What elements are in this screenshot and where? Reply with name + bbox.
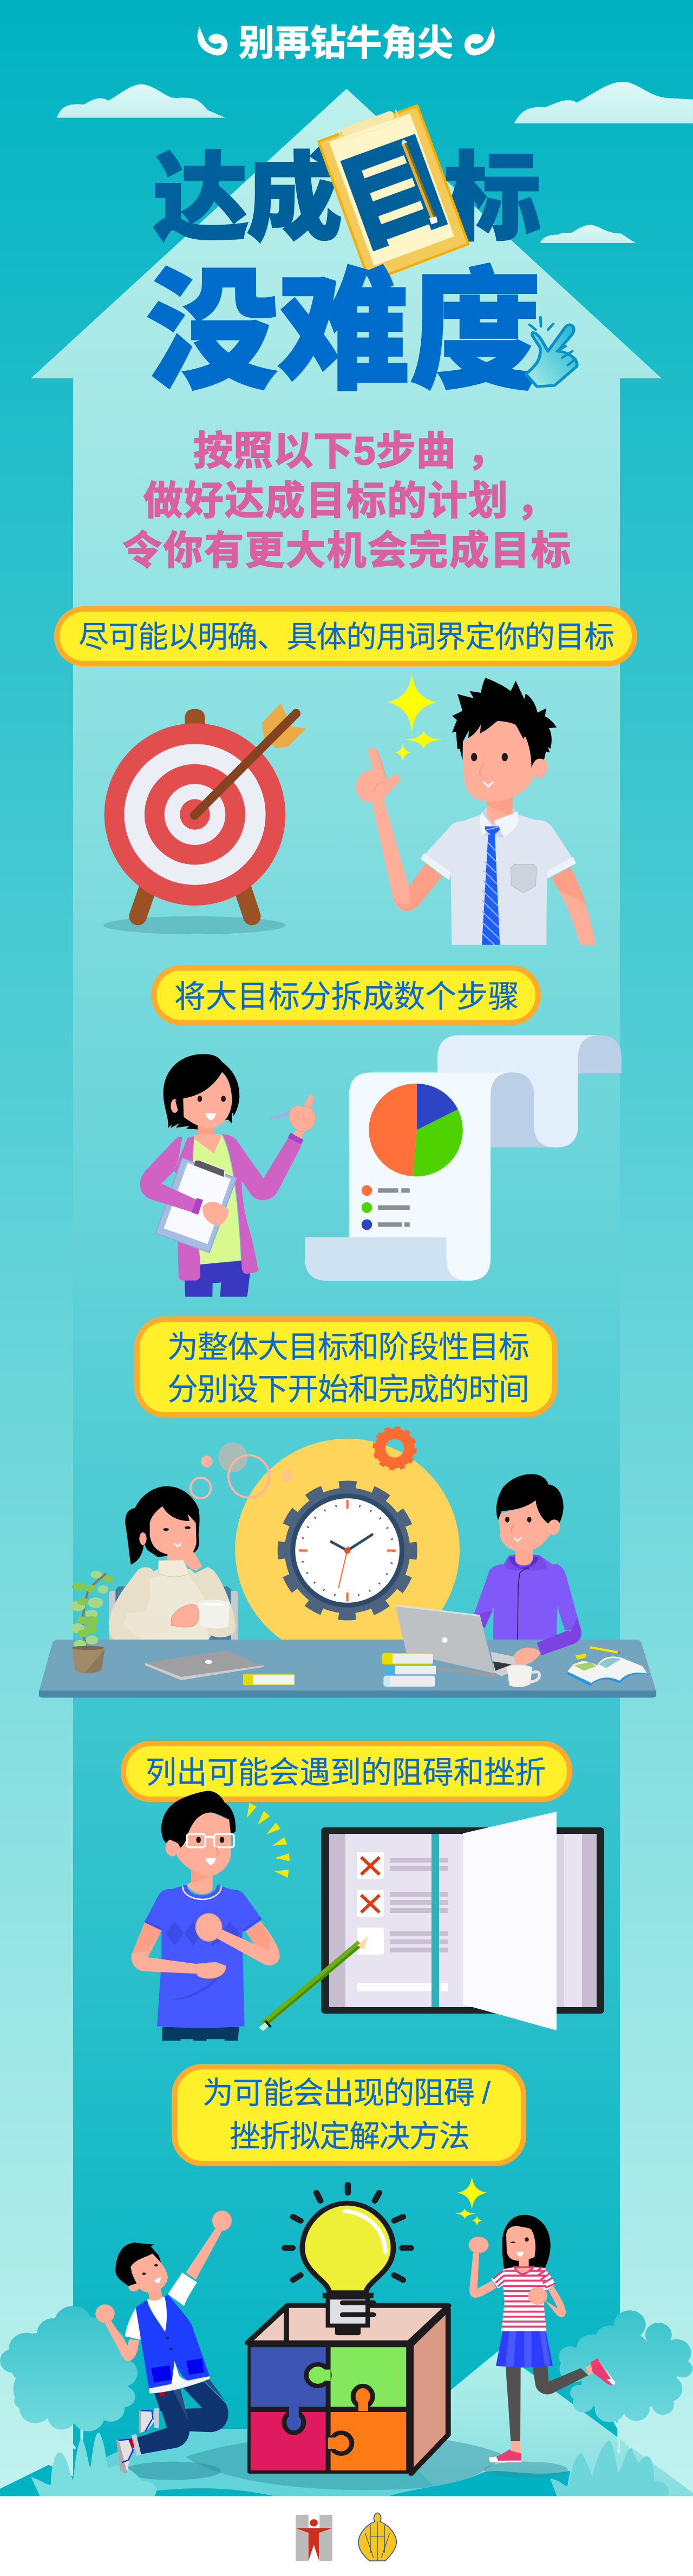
clipboard with title character: 目: [324, 120, 466, 268]
kicker text: 别再钻牛角尖: [239, 23, 453, 63]
icon: right horn: [465, 26, 495, 55]
icon: left horn: [198, 26, 227, 55]
arms behind shirt: [469, 2253, 496, 2298]
striped shirt: [491, 2267, 556, 2331]
sleeve and hand: [514, 1617, 581, 1666]
step 5 text line 2: 挫折拟定解决方法: [230, 2119, 470, 2154]
top kicker heading with horn icons: [198, 23, 495, 63]
striped tie: [482, 827, 500, 945]
main title: [146, 106, 577, 405]
shoes: [489, 2449, 521, 2462]
puzzle pieces: [247, 2345, 409, 2474]
intro line 1: 按照以下5步曲 ，: [193, 419, 507, 476]
light rays: [285, 2185, 411, 2280]
intro line 2: 做好达成目标的计划，: [143, 469, 557, 526]
sparkles: [387, 673, 442, 762]
title line 1 left: 达成: [153, 145, 343, 252]
pencil and eraser: [576, 1647, 620, 1660]
lifted page: [463, 1812, 557, 2030]
intro text: [122, 419, 571, 573]
box: [247, 2305, 449, 2343]
coffee cup: [507, 1665, 539, 1687]
step 3 text line 2: 分别设下开始和完成的时间: [167, 1372, 529, 1407]
right tree: [559, 2310, 692, 2453]
icon: notebook with checklist: [259, 1812, 604, 2031]
thought bubbles: [191, 1443, 293, 1498]
title line 2: 没难度: [146, 259, 541, 405]
single book: [243, 1674, 295, 1685]
step 2 text: 将大目标分拆成数个步骤: [174, 979, 519, 1014]
step 1 text: 尽可能以明确、具体的用词界定你的目标: [79, 620, 614, 654]
illustration: woman with clipboard: [140, 1054, 324, 1297]
open laptop: [395, 1604, 534, 1677]
logo: labour department figure: [296, 2515, 332, 2561]
lightbulb: [302, 2203, 394, 2293]
skirt: [496, 2331, 553, 2368]
step 5 text line 1: 为可能会出现的阻碍 /: [202, 2076, 491, 2110]
front shoe: [116, 2434, 141, 2473]
legs: [506, 2367, 589, 2441]
step 1 banner: [57, 609, 635, 664]
excitement rays: [247, 1803, 290, 1878]
pie legend: [362, 1185, 410, 1230]
pie chart: [369, 1084, 463, 1176]
open book: [566, 1656, 649, 1686]
step 2 banner: [154, 968, 538, 1022]
step 4 text: 列出可能会遇到的阻碍和挫折: [146, 1755, 546, 1790]
icon: clock in gear: [282, 1485, 413, 1616]
checklist items: [357, 1852, 448, 1991]
desk with items: [39, 1571, 656, 1697]
illustration: jumping boy: [96, 2211, 232, 2473]
back shoe: [139, 2408, 159, 2433]
step 4 banner: [123, 1743, 570, 1799]
step 3 text line 1: 为整体大目标和阶段性目标: [167, 1330, 529, 1365]
step 3 banner: [137, 1319, 555, 1415]
yellow circle backdrop: [235, 1439, 460, 1661]
logo: gold hands emblem: [358, 2513, 396, 2561]
left tree: [0, 2306, 138, 2469]
icon: target with arrow: [103, 703, 306, 934]
sparkles: [455, 2177, 487, 2226]
icon: pointing hand: [526, 317, 577, 386]
illustration: boy with glasses: [131, 1791, 290, 2041]
grass clumps: [31, 2433, 156, 2496]
step 5 banner: [174, 2067, 524, 2164]
illustration: clock backdrop: [191, 1428, 460, 1661]
desk items on the right: [382, 1604, 649, 1687]
icon: potted plant: [70, 1571, 114, 1674]
title line 1 right: 标: [444, 145, 541, 252]
clouds: [56, 82, 693, 243]
illustration: scroll with pie chart: [305, 1035, 622, 1281]
clipboard: [156, 1158, 237, 1253]
intro line 3: 令你有更大机会完成目标: [122, 529, 571, 573]
icon: orange gear: [375, 1428, 415, 1468]
illustration: woman in sweater: [109, 1486, 238, 1640]
closed laptop: [145, 1650, 264, 1680]
stack of books: [382, 1653, 436, 1687]
illustration: man in purple hoodie: [474, 1474, 581, 1640]
pencil: [259, 1936, 368, 2031]
icon: lightbulb and puzzle box: [247, 2185, 449, 2474]
footer logos: [296, 2513, 396, 2561]
illustration: boy with idea: [356, 673, 596, 945]
landscape with hills and trees: [0, 2306, 693, 2496]
illustration: cheering girl: [455, 2177, 616, 2462]
